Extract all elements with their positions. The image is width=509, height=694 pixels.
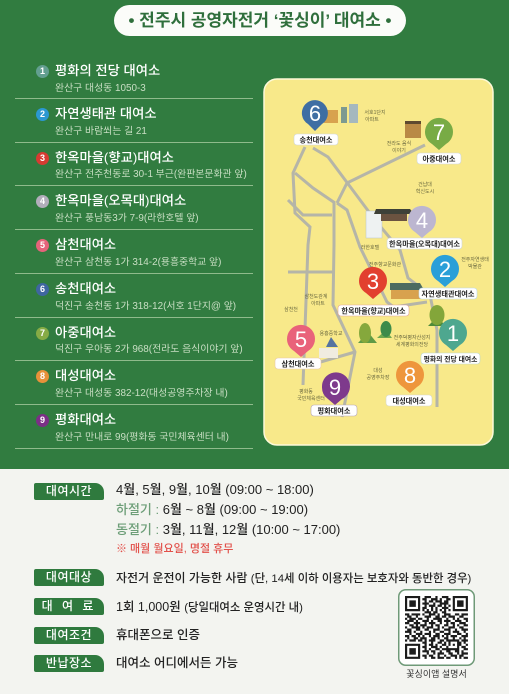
station 2: [15, 99, 253, 143]
station 3: [15, 143, 253, 186]
station 4: 완산구 풍남동3가 7-9(라한호텔 앞): [55, 213, 199, 224]
station 8: 대성대여소: [55, 368, 116, 383]
station 3: 완산구 전주천동로 30-1 부근(완판본문화관 앞): [55, 169, 247, 180]
label 대성대여소: 대성대여소: [392, 396, 426, 406]
tag: 대여료: 대 여 료: [42, 599, 96, 613]
tag: 대여료: [34, 598, 104, 615]
label 아중대여소: [417, 153, 461, 164]
building icon near Ajung: 혁신도시: [416, 188, 434, 195]
pin 2: 2: [439, 257, 451, 282]
school and misc map labels: 아파트: [311, 300, 325, 307]
station 1: 평화의 전당 대여소: [55, 63, 160, 78]
pin 6: [302, 100, 328, 131]
building icons near Songcheon: 아파트: [365, 116, 379, 123]
station 9: [15, 405, 253, 449]
station 7: 7: [40, 328, 45, 338]
building icon near Ajung: 건납대: [418, 181, 432, 188]
station 2: 완산구 바람쐬는 길 21: [55, 126, 147, 137]
rental hours text: 동절기 : 3월, 11월, 12월 (10:00 ~ 17:00): [116, 522, 340, 537]
label 삼천대여소: [275, 358, 321, 369]
rental hours text: [116, 482, 340, 555]
station 4: [15, 186, 253, 230]
station 6: 6: [40, 284, 45, 294]
station 4: 한옥마을(오목대)대여소: [55, 193, 186, 208]
pin 5: 5: [295, 327, 307, 352]
station 1: [15, 55, 253, 99]
label 평화의 전당 대여소: [421, 353, 480, 364]
QR code: [398, 589, 475, 666]
pin 1: 1: [447, 321, 459, 346]
label 평화의 전당 대여소: 평화의 전당 대여소: [424, 354, 477, 364]
label 삼천대여소: 삼천대여소: [281, 360, 315, 368]
school and misc map labels: 대성: [373, 367, 383, 374]
station 8: 완산구 대성동 382-12(대성공영주차장 내): [55, 388, 228, 399]
tag: 대여대상: [34, 569, 104, 586]
hyanggyo building: 박물관: [468, 263, 482, 270]
hyanggyo building: 전주향교문화관: [369, 261, 401, 268]
station 5: 완산구 삼천동 1가 314-2(용흥중학교 앞): [55, 257, 221, 268]
pin 1: [439, 319, 467, 351]
hyanggyo building: 전주자연생태: [461, 256, 489, 263]
station list: [15, 63, 253, 449]
hyanggyo building: [369, 256, 489, 299]
roads: [288, 145, 437, 417]
pin 8: 8: [404, 363, 416, 388]
condition text: 휴대폰으로 인증: [116, 628, 200, 642]
school and misc map labels: [284, 293, 390, 402]
station 7: [15, 318, 253, 361]
label 아중대여소: 아중대여소: [422, 154, 456, 164]
station 6: 송천대여소: [55, 281, 116, 296]
label 평화대여소: 평화대여소: [317, 406, 351, 416]
rental hours text: 하절기 : 6월 ~ 8월 (09:00 ~ 19:00): [116, 502, 308, 517]
trees: 전주덕평자산성지: [394, 334, 430, 341]
rental hours text: ※ 매월 월요일, 명절 휴무: [116, 543, 233, 555]
pin 3: 3: [367, 269, 379, 294]
rental info section: [34, 482, 475, 679]
label 한옥마을(향교)대여소: 한옥마을(향교)대여소: [341, 306, 406, 316]
station 2: 2: [40, 109, 45, 119]
building icons near Songcheon: 서호1단지: [364, 109, 386, 116]
station 9: 평화대여소: [55, 412, 116, 427]
school and misc map labels: 용흥중학교: [319, 330, 343, 337]
building icon near Ajung: 이야기: [392, 147, 406, 154]
school and misc map labels: 삼천도관계: [304, 293, 328, 300]
school and misc map labels: 공영주차장: [366, 374, 390, 381]
pin 5: [287, 325, 315, 357]
title pill: [114, 5, 406, 36]
tag: 반납장소: [34, 655, 104, 672]
rental hours text: 4월, 5월, 9월, 10월 (09:00 ~ 18:00): [116, 482, 314, 497]
tag: 대여조건: [34, 627, 104, 644]
map panel: [263, 78, 494, 446]
label 송천대여소: [294, 134, 338, 145]
pin 4: [408, 206, 436, 238]
station 4: 4: [40, 196, 45, 206]
station 1: 완산구 대성동 1050-3: [55, 83, 146, 94]
station 3: 한옥마을(향교)대여소: [55, 150, 174, 165]
label 대성대여소: [386, 395, 432, 406]
building icon near Ajung: [387, 121, 434, 195]
pin 2: [431, 255, 459, 287]
title pill: • 전주시 공영자전거 ‘꽃싱이’ 대여소 •: [128, 11, 392, 30]
station 3: 3: [40, 153, 45, 163]
pin 8: [396, 361, 424, 393]
trees: 세계평화의전당: [396, 341, 428, 348]
station 7: 덕진구 우아동 2가 968(전라도 음식이야기 앞): [55, 344, 243, 355]
eligibility text: 자전거 운전이 가능한 사람 (단, 14세 이하 이용자는 보호자와 동반한 경우): [116, 571, 471, 585]
hanok gate and tall building: 라한호텔: [361, 244, 380, 251]
tag: 반납장소: 반납장소: [46, 656, 92, 670]
trees: [358, 305, 445, 348]
building icon near Ajung: 전라도 음식: [387, 140, 411, 147]
hanok gate and tall building: [361, 209, 414, 251]
label 자연생태관대여소: 자연생태관대여소: [422, 290, 475, 298]
label 한옥마을(오목대)대여소: 한옥마을(오목대)대여소: [389, 240, 460, 248]
building icons near Songcheon: [324, 104, 386, 123]
station 7: 아중대여소: [55, 325, 116, 340]
station 6: 덕진구 송천동 1가 318-12(서호 1단지@ 앞): [55, 301, 236, 312]
label 송천대여소: 송천대여소: [299, 136, 333, 144]
station 6: [15, 274, 253, 318]
station 9: 완산구 만내로 99(평화동 국민체육센터 내): [55, 432, 229, 443]
pin 7: 7: [433, 120, 445, 145]
pin 9: 9: [329, 375, 341, 400]
fee text: 1회 1,000원 (당일대여소 운영시간 내): [116, 600, 303, 614]
station 5: 5: [40, 240, 45, 250]
pin 7: [425, 118, 453, 150]
school and misc map labels: 평화동: [299, 388, 313, 395]
station 1: 1: [40, 66, 45, 76]
pin 3: [359, 267, 387, 299]
station 5: [15, 230, 253, 274]
station 2: 자연생태관 대여소: [55, 106, 157, 121]
tag: 대여시간: 대여시간: [46, 484, 92, 498]
school and misc map labels: 국민체육센터: [297, 395, 325, 402]
station 5: 삼천대여소: [55, 237, 116, 252]
pin 6: 6: [309, 101, 321, 126]
panel: green station section: [0, 0, 509, 469]
tag: 대여대상: 대여대상: [46, 570, 92, 584]
tag: 대여시간: [34, 483, 104, 500]
station 8: [15, 361, 253, 405]
tag: 대여조건: 대여조건: [46, 628, 92, 642]
return text: 대여소 어디에서든 가능: [116, 656, 238, 670]
QR caption: 꽃싱이앱 설명서: [406, 669, 467, 679]
school and misc map labels: 삼천천: [284, 306, 298, 313]
station 9: 9: [40, 415, 45, 425]
pin 4: 4: [416, 208, 428, 233]
label 평화대여소: [311, 405, 357, 416]
station 8: 8: [40, 371, 45, 381]
pin 9: [322, 372, 350, 405]
